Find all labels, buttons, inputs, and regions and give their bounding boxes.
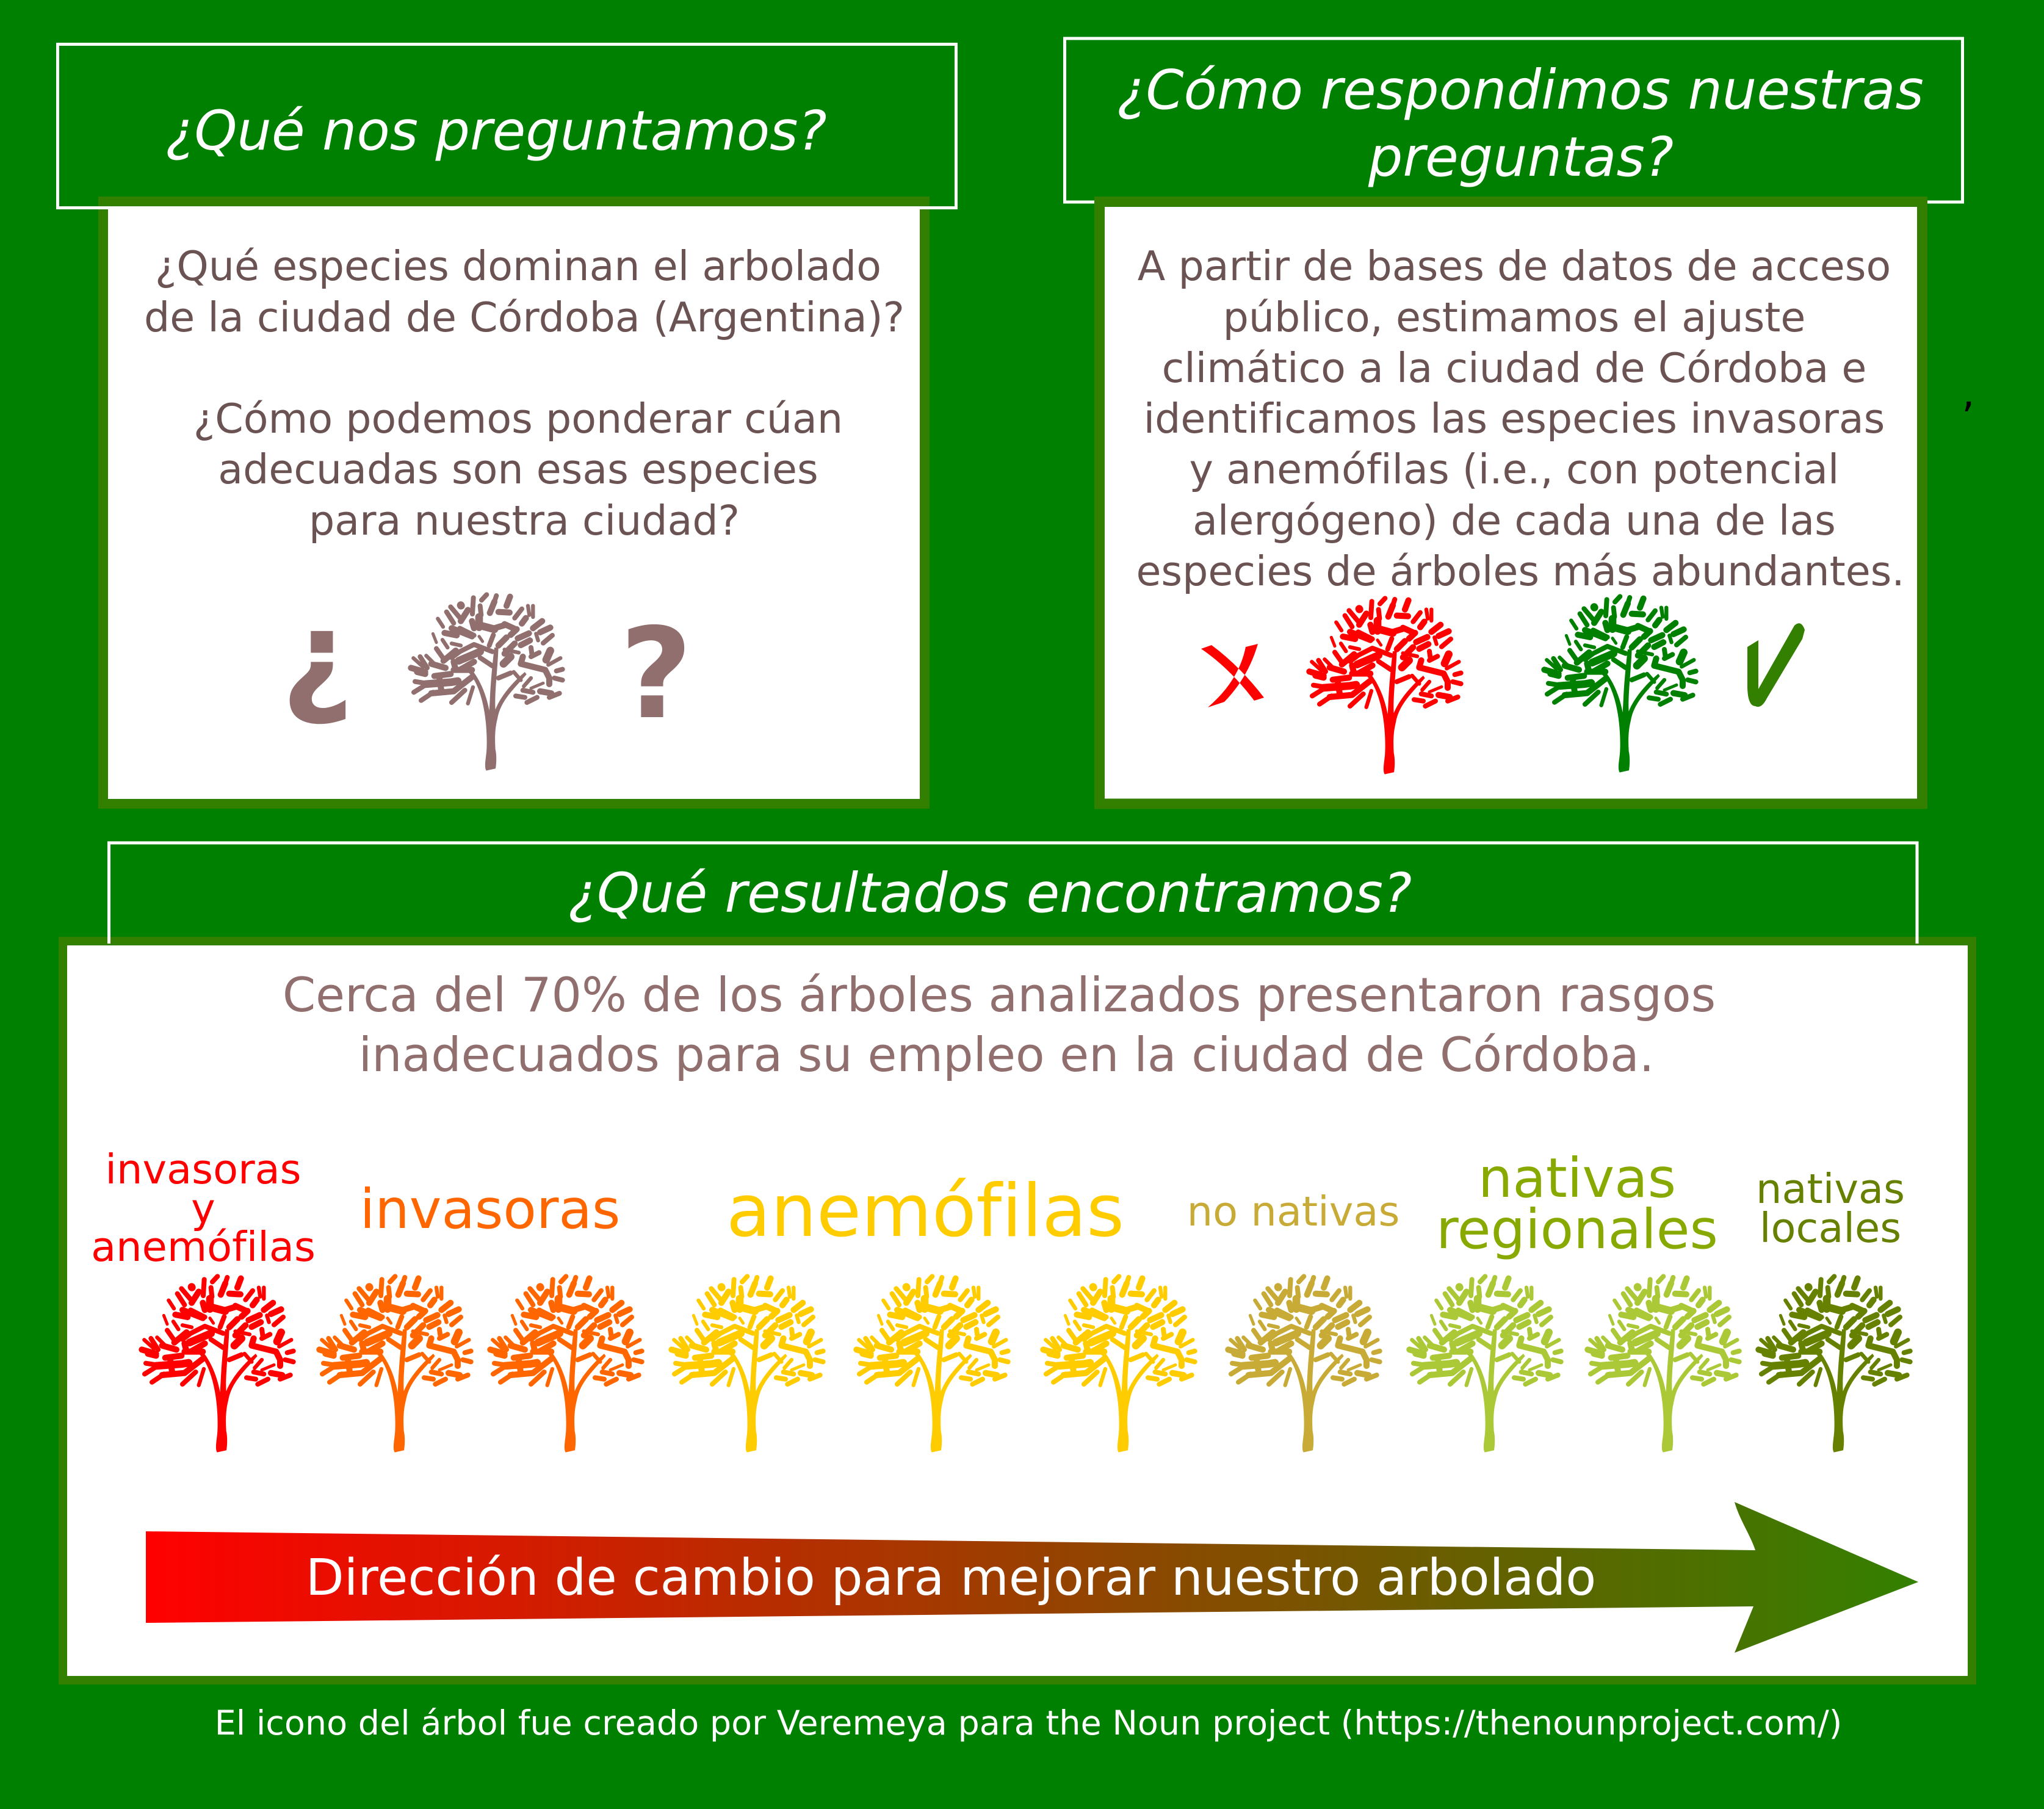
heading: method header: preguntas?: [1368, 125, 1674, 189]
panel: question content: [103, 201, 925, 804]
text: results summary: Cerca del 70% de los árboles analizados presentaron rasgos: [283, 968, 1716, 1023]
row of coloured trees: [142, 1276, 1910, 1453]
heading: method header: [1064, 38, 1963, 202]
text: method description: público, estimamos el ajuste: [1223, 294, 1805, 341]
icon: opening question mark: ¿: [281, 584, 353, 729]
arrow: direction of change: [146, 1502, 1918, 1653]
icon: brown tree: [411, 594, 563, 771]
heading: question header: [57, 44, 956, 208]
footer credit: El icono del árbol fue creado por Veremeya para the Noun project (https://thenounproject.com/): [215, 1703, 1842, 1743]
text: results summary: [283, 968, 1716, 1083]
text: research questions: de la ciudad de Córdoba (Argentina)?: [144, 294, 905, 341]
heading: results header: [109, 843, 1917, 944]
icon: closing question mark: ?: [620, 602, 692, 747]
text: method description: A partir de bases de datos de acceso: [1138, 242, 1891, 290]
heading: method header: ¿Cómo respondimos nuestras: [1117, 58, 1924, 121]
label: nativas regionales: regionales: [1436, 1197, 1718, 1261]
text: method description: especies de árboles más abundantes.: [1136, 547, 1905, 595]
label: invasoras y anemófilas: invasoras: [105, 1146, 302, 1193]
label: nativas locales: [1756, 1165, 1905, 1252]
label: invasoras: invasoras: [360, 1177, 620, 1241]
icon: red cross: [1201, 644, 1264, 707]
text: research questions: adecuadas son esas especies: [218, 446, 818, 493]
label: invasoras y anemófilas: y: [191, 1185, 215, 1232]
label: nativas regionales: [1436, 1146, 1718, 1261]
text: method description: identificamos las especies invasoras: [1144, 395, 1885, 442]
text: research questions: [144, 242, 905, 544]
panel: method content: [1100, 201, 1923, 804]
text: method description: climático a la ciudad de Córdoba e: [1162, 344, 1866, 392]
icon: green tree: [1544, 596, 1696, 773]
icon: green check: [1747, 623, 1805, 707]
label: invasoras y anemófilas: anemófilas: [91, 1223, 316, 1271]
text: method description: alergógeno) de cada una de las: [1193, 497, 1836, 544]
label: nativas locales: locales: [1760, 1204, 1901, 1252]
text: method description: y anemófilas (i.e., con potencial: [1190, 446, 1839, 493]
heading: results header: ¿Qué resultados encontramos?: [568, 861, 1412, 925]
label: anemófilas: anemófilas: [726, 1169, 1124, 1254]
text: results summary: inadecuados para su empleo en la ciudad de Córdoba.: [359, 1028, 1654, 1083]
label: nativas locales: nativas: [1756, 1165, 1905, 1213]
arrow: direction of change: Dirección de cambio para mejorar nuestro arbolado: [306, 1549, 1596, 1607]
text: research questions: para nuestra ciudad?: [309, 497, 740, 544]
stray comma mark: ,: [1962, 369, 1975, 416]
text: method description: [1136, 242, 1905, 595]
icon: red tree: [1309, 598, 1461, 775]
label: nativas regionales: nativas: [1478, 1146, 1676, 1210]
heading: question header: ¿Qué nos preguntamos?: [165, 99, 827, 162]
label: invasoras y anemófilas: [91, 1146, 316, 1271]
text: research questions: ¿Cómo podemos ponderar cúan: [193, 395, 843, 442]
label: no nativas: no nativas: [1187, 1188, 1399, 1235]
text: research questions: ¿Qué especies dominan el arbolado: [155, 242, 881, 290]
panel: results content: [63, 941, 1972, 1680]
